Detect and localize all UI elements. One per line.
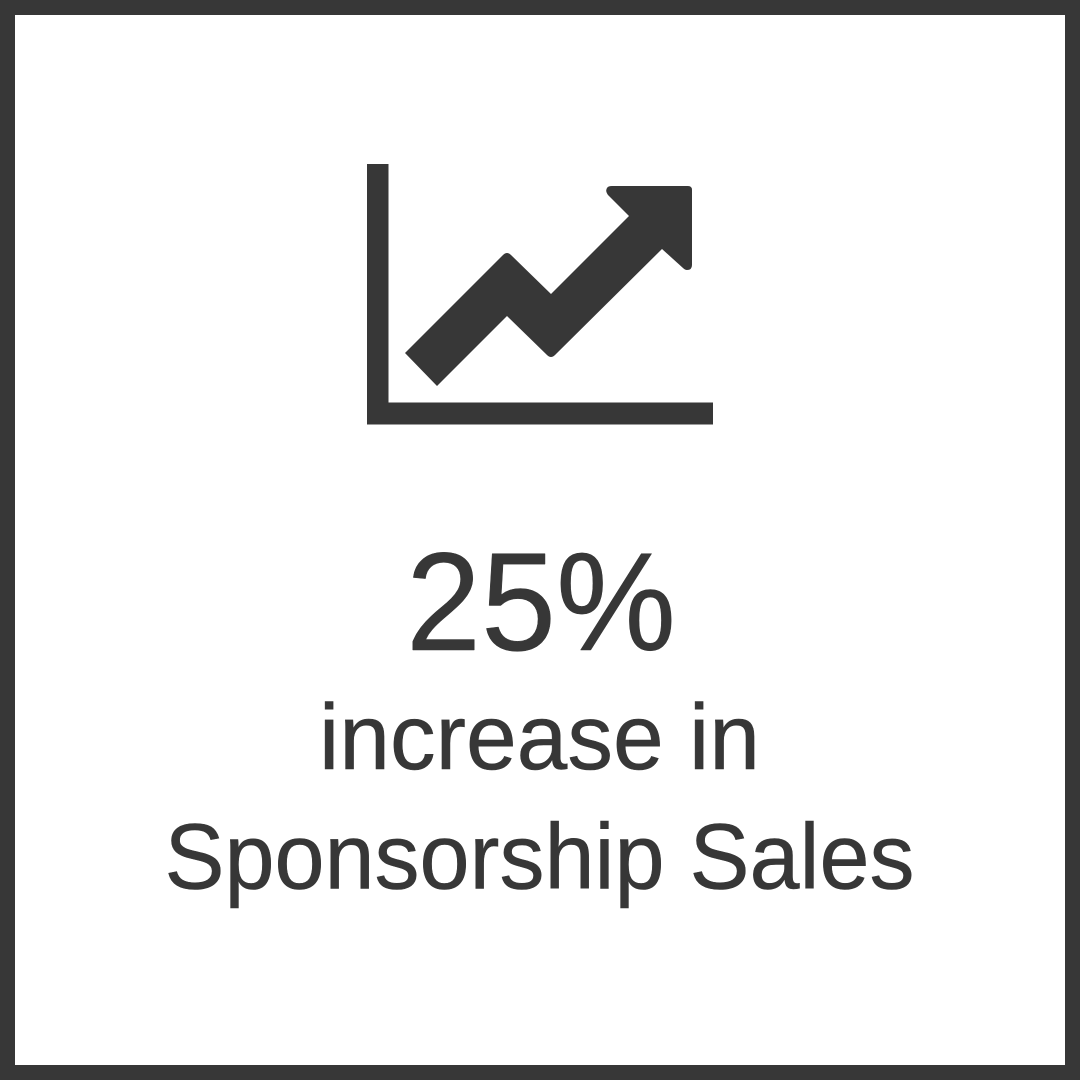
text: increase in: increase in — [319, 685, 760, 789]
big number: 25% — [406, 523, 676, 680]
icon: rising chart with arrow — [367, 164, 713, 424]
text: Sponsorship Sales: Sponsorship Sales — [164, 804, 914, 908]
